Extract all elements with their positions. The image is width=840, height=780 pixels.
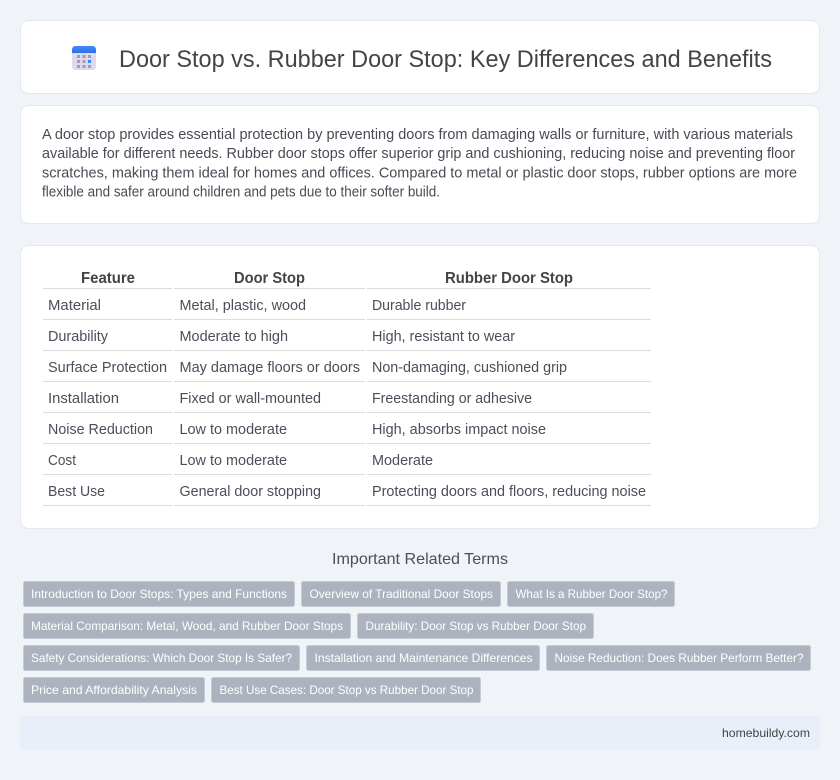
row: installation: Fixed or wall-mounted [180,391,321,407]
row: surface protection: Surface Protection [48,360,167,376]
text block: description: scratches, making them ideal for homes and offices. Compared to metal or plastic door stops, rubber options are more [42,166,797,182]
tag: Noise Reduction: Does Rubber Perform Better? [554,651,804,665]
table header: Door Stop [234,270,305,287]
tag [24,614,350,638]
row: durability: Durability [48,329,109,345]
tag: Installation and Maintenance Differences [314,651,532,665]
row: durability: High, resistant to wear [372,329,515,345]
row: material: Durable rubber [372,298,466,314]
tag [24,678,204,702]
row: cost: Cost [48,453,76,469]
tag: Safety Considerations: Which Door Stop Is Safer? [31,651,292,665]
text block: description: flexible and safer around children and pets due to their softer build. [42,184,440,200]
panel: comparison table [20,246,820,528]
text block: description: available for different needs. Rubber door stops offer superior grip and cushioning, reducing noise and preventing floor [42,146,795,162]
row: material: Material [48,298,101,314]
row: best use: Best Use [48,484,105,500]
row: noise reduction: Noise Reduction [48,422,153,438]
tag [24,582,294,606]
tag [212,678,480,702]
tag: What Is a Rubber Door Stop? [516,587,668,601]
row: cost [48,453,433,469]
row: best use: Protecting doors and floors, reducing noise [372,484,646,500]
table header [81,270,573,287]
row: durability [48,329,515,345]
tag: Introduction to Door Stops: Types and Functions [31,587,287,601]
row: surface protection: Non-damaging, cushioned grip [372,360,567,376]
tag [546,646,810,670]
row: installation: Freestanding or adhesive [372,391,532,407]
tag [508,582,674,606]
tag: Best Use Cases: Door Stop vs Rubber Door Stop [220,683,474,697]
footer [20,716,820,750]
row: material: Metal, plastic, wood [180,298,306,314]
tag: Durability: Door Stop vs Rubber Door Stop [366,619,586,633]
row: surface protection: May damage floors or doors [180,360,360,376]
tag [24,646,300,670]
row: surface protection [48,360,567,376]
footer source: homebuildy.com [722,726,810,740]
tag [358,614,594,638]
tag cloud: related terms [24,582,810,702]
panel: header [20,20,820,94]
table header: Feature [81,270,135,287]
row: best use: General door stopping [180,484,321,500]
table header: Rubber Door Stop [445,270,573,287]
tag: Overview of Traditional Door Stops [310,587,493,601]
row: best use [48,484,646,500]
row: noise reduction: Low to moderate [180,422,287,438]
text block: description [42,127,797,200]
row: installation [48,391,532,407]
text block: description: A door stop provides essential protection by preventing doors from damaging walls or furniture, with various materials [42,127,793,143]
tag [302,582,500,606]
panel: description [20,106,820,224]
icon: calendar [72,46,96,70]
tag [306,646,540,670]
title: Door Stop vs. Rubber Door Stop: Key Differences and Benefits [119,46,772,73]
row: noise reduction: High, absorbs impact noise [372,422,546,438]
row: installation: Installation [48,391,119,407]
row: material [48,298,466,314]
row: noise reduction [48,422,546,438]
row: durability: Moderate to high [180,329,288,345]
tag: Price and Affordability Analysis [31,683,197,697]
tag: Material Comparison: Metal, Wood, and Rubber Door Stops [31,619,343,633]
heading: related terms: Important Related Terms [332,551,508,568]
row: cost: Moderate [372,453,433,469]
row: cost: Low to moderate [180,453,287,469]
